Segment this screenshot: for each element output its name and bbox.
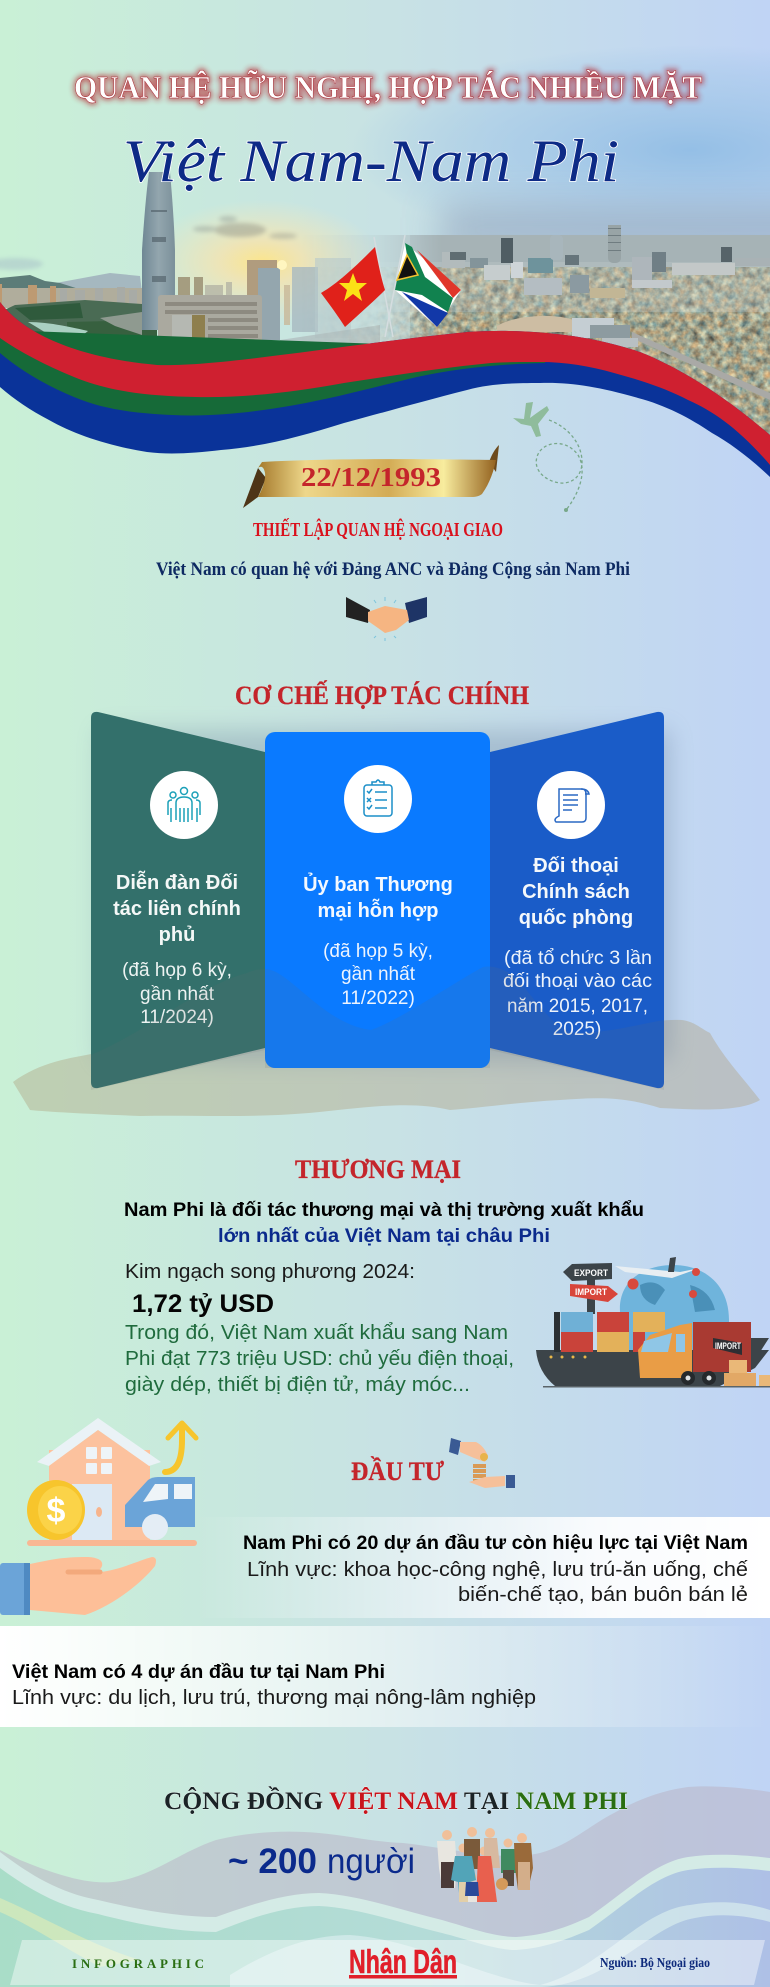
- flag: Vietnam: [321, 247, 385, 327]
- flags: [321, 235, 461, 337]
- number: community size: ~ 200: [228, 1842, 317, 1881]
- text: Vietnam investment: Lĩnh vực: du lịch, lưu trú, thương mại nông-lâm nghiệp: [12, 1687, 536, 1709]
- card: defence policy dialogue: đối thoại vào các: [503, 971, 652, 992]
- header city skyline photo: [0, 60, 770, 435]
- text: turnover: Kim ngạch song phương 2024:: [125, 1261, 415, 1283]
- text: South Africa investment: Nam Phi có 20 dự án đầu tư còn hiệu lực tại Việt Nam: [243, 1532, 748, 1554]
- downtown buildings: [442, 252, 465, 268]
- icon: people: [150, 771, 218, 839]
- card: joint trade committee: Ủy ban Thương: [303, 872, 453, 896]
- illustration: family group: [437, 1827, 533, 1902]
- heading: Vietnamese community: CỘNG ĐỒNG VIỆT NAM TẠI NAM PHI: [164, 1786, 628, 1815]
- card: defence policy dialogue: Đối thoại: [533, 855, 619, 877]
- flag poles: [374, 235, 405, 337]
- footer panel: [10, 1940, 765, 1985]
- panel: cooperation cards: [91, 712, 664, 1088]
- card: joint trade committee: (đã họp 5 kỳ,: [323, 941, 433, 962]
- text: South Africa investment: biến-chế tạo, bán buôn bán lẻ: [458, 1584, 748, 1606]
- date ribbon banner: [243, 445, 499, 508]
- haze towers: [247, 260, 277, 295]
- text: exports: Trong đó, Việt Nam xuất khẩu sang Nam: [125, 1322, 508, 1344]
- text: South Africa investment: Lĩnh vực: khoa học-công nghệ, lưu trú-ăn uống, chế: [247, 1559, 748, 1581]
- heading: main mechanisms: CƠ CHẾ HỢP TÁC CHÍNH: [235, 681, 529, 710]
- tricolor ribbon: [0, 302, 770, 477]
- decorative waves: [0, 1786, 770, 1987]
- number: turnover value: 1,72 tỷ USD: [132, 1290, 274, 1318]
- logo: Nhân Dân: Nhân Dân: [349, 1943, 457, 1980]
- card: joint trade committee: gần nhất: [341, 964, 416, 985]
- illustration: shipping and logistics: IMPORT: [575, 1287, 607, 1297]
- card: intergovernmental forum: (đã họp 6 kỳ,: [122, 960, 232, 981]
- band: Vietnam investment: [0, 1626, 770, 1727]
- icon: scroll: [537, 771, 605, 839]
- text: exports: giày dép, thiết bị điện tử, máy móc...: [125, 1374, 470, 1396]
- icon: coins in hands: [449, 1438, 515, 1488]
- distant buildings left of tower: [178, 277, 203, 295]
- illustration: house car coin on hand: $: [47, 1492, 66, 1530]
- footer source: Nguồn: Bộ Ngoại giao: [600, 1956, 710, 1971]
- text: trade statement: lớn nhất của Việt Nam tại châu Phi: [218, 1226, 550, 1247]
- card: intergovernmental forum: [91, 712, 265, 1088]
- illustration: shipping and logistics: [536, 1257, 770, 1388]
- section: trade: [124, 1155, 770, 1396]
- card: intergovernmental forum: 11/2024): [140, 1007, 214, 1028]
- illustration: shipping and logistics: EXPORT: [574, 1268, 608, 1278]
- number: community size: [228, 1842, 415, 1881]
- text: South Africa investment: [243, 1532, 748, 1606]
- text: trade statement: [124, 1200, 644, 1247]
- icon: plane with dashed route: [513, 402, 582, 512]
- card shadow: [100, 730, 670, 1060]
- heading: investment: ĐẦU TƯ: [351, 1457, 444, 1486]
- flag: South Africa: [395, 243, 461, 327]
- title: QUAN HỆ HỮU NGHỊ, HỢP TÁC NHIỀU MẶT: [74, 69, 702, 105]
- card: joint trade committee: mại hỗn hợp: [318, 898, 438, 922]
- illustration: shipping and logistics: IMPORT: [715, 1341, 741, 1351]
- heading: diplomatic relations: THIẾT LẬP QUAN HỆ NGOẠI GIAO: [253, 517, 503, 541]
- icon: handshake: [346, 597, 427, 641]
- card: defence policy dialogue: (đã tổ chức 3 lần: [504, 948, 652, 969]
- mountain behind cards: [13, 967, 760, 1116]
- text: Vietnam investment: [12, 1661, 536, 1709]
- card: defence policy dialogue: Chính sách: [522, 881, 630, 903]
- heading: trade: THƯƠNG MẠI: [295, 1155, 461, 1184]
- number: community size: người: [327, 1842, 415, 1881]
- title: QUAN HỆ HỮU NGHỊ, HỢP TÁC NHIỀU MẶT: [74, 69, 702, 105]
- card: joint trade committee: 11/2022): [341, 988, 415, 1009]
- text: exports: [125, 1322, 514, 1396]
- text: party relations: Việt Nam có quan hệ với Đảng ANC và Đảng Cộng sản Nam Phi: [156, 559, 630, 580]
- text: exports: Phi đạt 773 triệu USD: chủ yếu điện thoại,: [125, 1348, 514, 1370]
- card: defence policy dialogue: 2025): [553, 1019, 601, 1040]
- sun: [277, 260, 287, 270]
- card: intergovernmental forum: Diễn đàn Đối: [116, 870, 238, 894]
- icon: clipboard: [344, 765, 412, 833]
- left clouds: [0, 216, 297, 270]
- open ground and road: [497, 316, 573, 332]
- mountain overlay on cards: [91, 967, 664, 1090]
- band: South Africa investment: [196, 1517, 770, 1618]
- card: defence policy dialogue: [490, 712, 664, 1088]
- illustration: house car coin on hand: [0, 1418, 197, 1615]
- card: joint trade committee: [265, 732, 490, 1068]
- footer label: infographic: INFOGRAPHIC: [72, 1956, 204, 1971]
- card: intergovernmental forum: gần nhất: [140, 984, 215, 1005]
- card: defence policy dialogue: năm 2015, 2017,: [507, 996, 648, 1017]
- text: trade statement: Nam Phi là đối tác thương mại và thị trường xuất khẩu: [124, 1200, 644, 1221]
- date: 22/12/1993: [301, 462, 441, 492]
- card: intergovernmental forum: phủ: [159, 924, 195, 946]
- text: Vietnam investment: Việt Nam có 4 dự án đầu tư tại Nam Phi: [12, 1661, 385, 1683]
- script subtitle: Việt Nam-Nam Phi: [123, 128, 619, 194]
- mall building: [158, 295, 262, 340]
- card: defence policy dialogue: quốc phòng: [519, 907, 633, 929]
- landmark tower: [142, 172, 175, 330]
- card: intergovernmental forum: tác liên chính: [113, 898, 241, 920]
